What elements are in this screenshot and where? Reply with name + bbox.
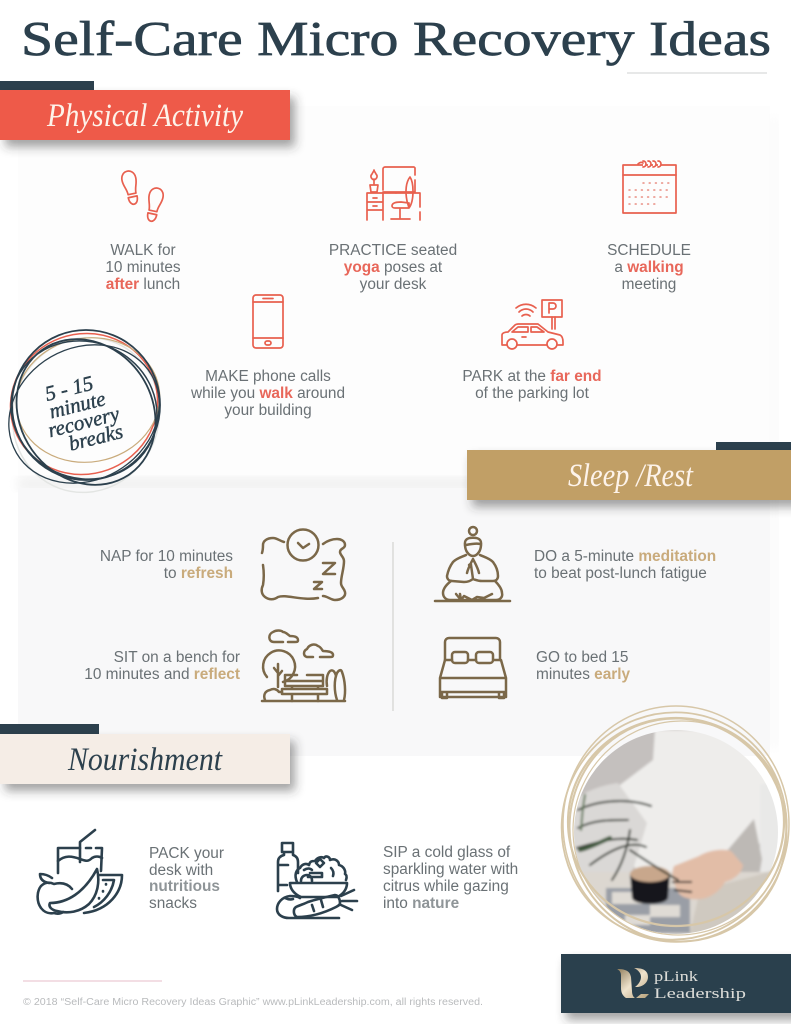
callout: recovery breaks circle: 5 - 15: [42, 371, 96, 406]
text: meditation: DO a 5-minute meditation: [534, 548, 716, 565]
panel: nourishment: [0, 724, 518, 918]
footer rule: [23, 980, 162, 982]
text: schedule: meeting: [622, 276, 676, 293]
callout: recovery breaks circle: breaks: [66, 419, 125, 456]
text: walk: after lunch: [106, 276, 180, 293]
text: practice: PRACTICE seated: [329, 242, 457, 259]
panel: physical activity: [0, 81, 691, 419]
text: practice: your desk: [360, 276, 427, 293]
icon: phone: [253, 295, 283, 348]
nourishment heading banner: Nourishment: [67, 742, 223, 778]
page background panels: [18, 106, 778, 756]
callout: recovery breaks circle: [0, 312, 185, 513]
physical activity heading banner: [0, 81, 290, 140]
icon: bed: [440, 638, 506, 698]
text: pack: snacks: [149, 895, 197, 912]
text: pack: nutritious: [149, 878, 220, 895]
text: walk: 10 minutes: [105, 259, 181, 276]
icon: smoothie and fruit: [38, 830, 122, 914]
icon: desk: [367, 167, 420, 220]
text: sip: into nature: [383, 895, 459, 912]
panel: sleep and rest: [84, 442, 791, 711]
icon: pillow and clock: [262, 530, 345, 600]
text: sip: citrus while gazing: [383, 878, 509, 895]
sleep heading banner: [467, 442, 791, 500]
text: make phone calls: while you walk around: [191, 385, 345, 402]
text: pack: desk with: [149, 862, 213, 879]
text: nap: to refresh: [164, 565, 233, 582]
callout: recovery breaks circle: minute: [47, 386, 108, 423]
icon: park bench: [262, 630, 345, 701]
text: walk: WALK for: [110, 242, 176, 259]
text: sip: SIP a cold glass of: [383, 844, 511, 861]
text: sit: SIT on a bench for: [114, 649, 240, 666]
decorative gold rings: [524, 675, 791, 979]
icon: calendar: [623, 161, 676, 213]
physical activity heading banner: Physical Activity: [46, 98, 243, 134]
icon: meditation: [435, 527, 510, 601]
text: schedule: SCHEDULE: [607, 242, 691, 259]
text: sip: sparkling water with: [383, 861, 518, 878]
title: Self-Care Micro Recovery Ideas: [21, 11, 771, 66]
logo mark: [617, 968, 649, 998]
text: schedule: a walking: [614, 259, 684, 276]
photo: hand and coffee on desk: [560, 705, 790, 943]
logo box: [561, 954, 791, 1013]
text: meditation: to beat post-lunch fatigue: [534, 565, 707, 582]
text: park: PARK at the far end: [462, 368, 602, 385]
divider: [392, 542, 394, 711]
logo text: pLink: [654, 969, 699, 985]
text: make phone calls: your building: [224, 402, 312, 419]
footer copyright: © 2018 “Self-Care Micro Recovery Ideas Graphic” www.pLinkLeadership.com, all rights reserved.: [23, 997, 483, 1008]
text: park: of the parking lot: [475, 385, 590, 402]
logo text: Leadership: [654, 986, 746, 1002]
text: pack: PACK your: [149, 845, 224, 862]
text: go to bed: minutes early: [536, 666, 630, 683]
callout: recovery breaks circle: recovery: [45, 401, 122, 442]
text: make phone calls: MAKE phone calls: [205, 368, 331, 385]
text: sit: 10 minutes and reflect: [84, 666, 240, 683]
icon: parking car: [502, 300, 563, 349]
sleep heading banner: Sleep /Rest: [568, 458, 694, 494]
nourishment heading banner: [0, 724, 290, 784]
icon: footprints: [120, 170, 165, 223]
text: nap: NAP for 10 minutes: [100, 548, 233, 565]
text: go to bed: GO to bed 15: [536, 649, 628, 666]
text: practice: yoga poses at: [344, 259, 442, 276]
icon: groceries: [277, 843, 357, 918]
